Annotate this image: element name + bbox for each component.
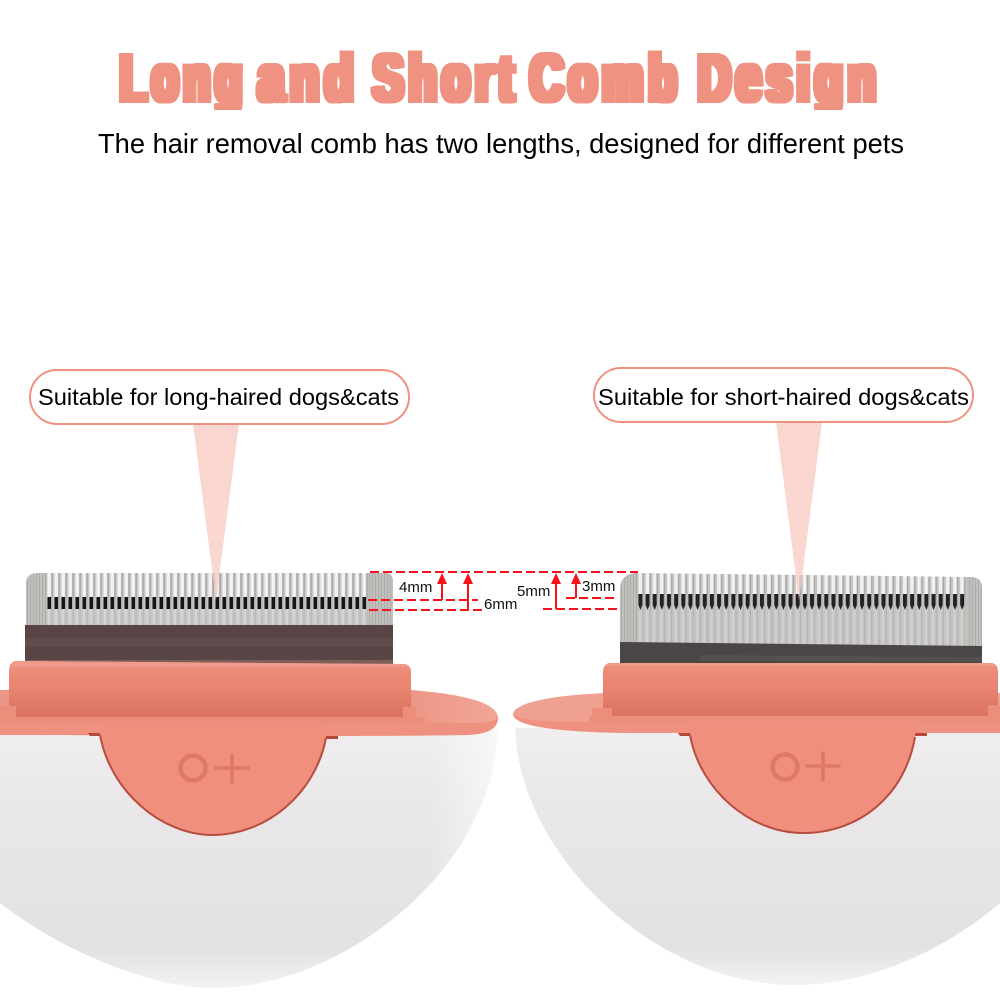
icon: O plus mark: [772, 753, 839, 780]
short comb blade: [620, 573, 982, 665]
pointer beam: right: [776, 422, 822, 600]
lid slot notches: [589, 705, 1000, 722]
label 5mm: 5mm: [517, 583, 550, 600]
title: Short: [373, 41, 519, 116]
white bowl body: [515, 728, 1000, 985]
dial tab: [678, 723, 927, 833]
subtitle: The hair removal comb has two lengths, designed for different pets: [98, 128, 904, 159]
white bowl body: [0, 728, 497, 988]
right product: short comb tool: [513, 573, 1000, 985]
raised coral block: [603, 663, 998, 716]
title: Design: [698, 41, 881, 116]
callout: long-haired: Suitable for long-haired dogs&cats: [38, 384, 399, 410]
lid slot notches: [0, 706, 425, 723]
coral lid: [0, 690, 498, 736]
raised coral block: [9, 661, 411, 717]
dashed guide lines: [368, 572, 638, 610]
dial tab: [88, 724, 338, 835]
callout: short-haired: [594, 368, 973, 422]
measurement annotations: [368, 572, 638, 613]
title: Long: [120, 41, 247, 116]
title: and: [258, 41, 359, 116]
measurement arrows: [437, 573, 581, 610]
long comb blade: [25, 573, 393, 664]
title: Comb: [530, 41, 682, 116]
label 3mm: 3mm: [582, 578, 615, 595]
label 4mm: 4mm: [399, 579, 432, 596]
title: [118, 50, 877, 110]
callout: long-haired: [30, 370, 409, 424]
label 6mm: 6mm: [484, 596, 517, 613]
coral lid: [513, 693, 1000, 733]
icon: O plus mark: [180, 755, 248, 782]
left product: long comb tool: [0, 573, 498, 988]
pointer beam: left: [193, 424, 239, 600]
callout: short-haired: Suitable for short-haired dogs&cats: [598, 384, 969, 410]
